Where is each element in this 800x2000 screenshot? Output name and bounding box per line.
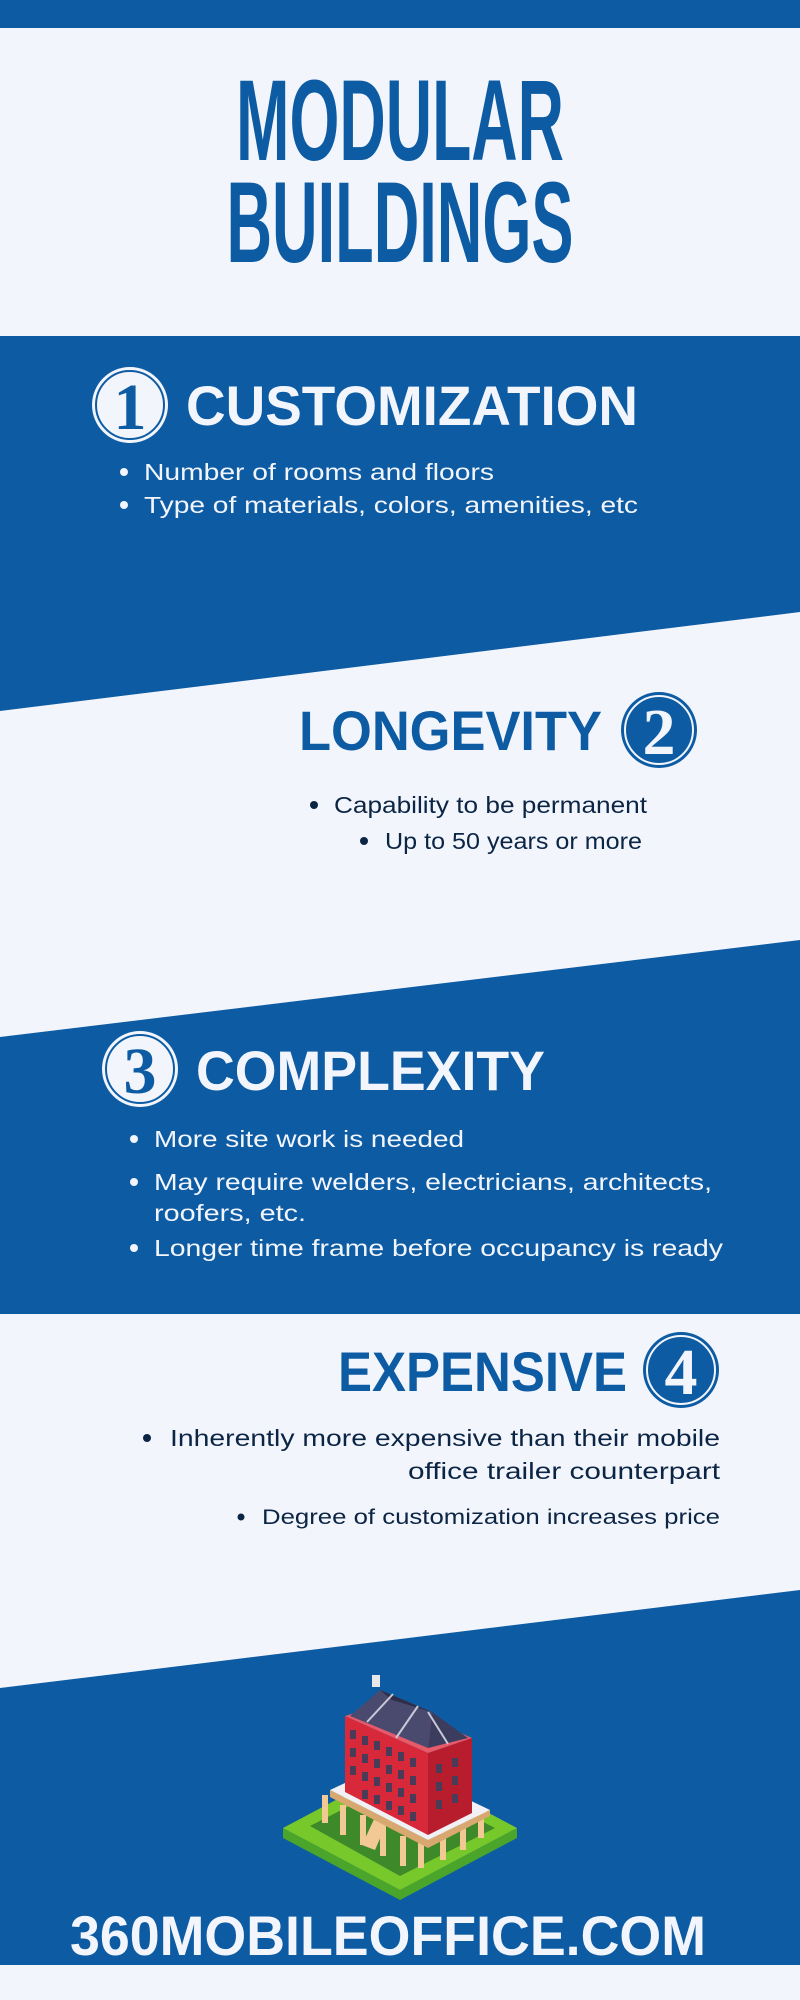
- panel: expensive: [143, 1332, 721, 1529]
- icon: number 1: [92, 367, 168, 444]
- bullet list: Number of rooms and floors: [144, 459, 494, 485]
- icon: number 2: 2: [642, 696, 676, 769]
- windows: [350, 1730, 458, 1821]
- bullet list: roofers, etc.: [154, 1200, 306, 1226]
- bullet list: Capability to be permanent: [334, 792, 648, 818]
- bullet list: Longer time frame before occupancy is ready: [154, 1235, 724, 1261]
- bullet list: [120, 459, 638, 518]
- ground: [283, 1828, 517, 1900]
- bullet list: Up to 50 years or more: [385, 828, 642, 854]
- roof: [350, 1690, 432, 1748]
- icon: number 3: [102, 1031, 178, 1108]
- icon: number 2: [621, 692, 697, 769]
- heading: expensive: EXPENSIVE: [338, 1340, 627, 1403]
- footer website: 360MOBILEOFFICE.COM: [70, 1904, 706, 1967]
- bullet list: Inherently more expensive than their mobile: [170, 1425, 720, 1451]
- bullet list: office trailer counterpart: [408, 1458, 721, 1484]
- heading: longevity: LONGEVITY: [299, 699, 602, 762]
- bullet list: Degree of customization increases price: [262, 1506, 720, 1529]
- title: [226, 57, 574, 287]
- icon: number 4: 4: [664, 1336, 698, 1409]
- icon: number 1: 1: [114, 371, 146, 444]
- bullet list: May require welders, electricians, architects,: [154, 1169, 712, 1195]
- bullet list: [130, 1126, 724, 1261]
- walls: [345, 1716, 428, 1835]
- icon: modular building: [283, 1675, 517, 1900]
- bullet list: Type of materials, colors, amenities, etc: [144, 492, 638, 518]
- icon: number 4: [643, 1332, 719, 1409]
- heading: customization: CUSTOMIZATION: [186, 374, 638, 437]
- top bar: [0, 0, 800, 28]
- panel: customization background: [0, 336, 800, 711]
- icon: number 3: 3: [124, 1035, 156, 1108]
- bullet list: [143, 1425, 721, 1529]
- platform: [330, 1790, 490, 1848]
- heading: complexity: COMPLEXITY: [196, 1039, 545, 1102]
- panel: longevity: [299, 692, 697, 854]
- panel: customization: [92, 367, 638, 518]
- panel: footer background: [0, 1590, 800, 1965]
- stilts: [322, 1795, 484, 1868]
- panel: complexity background: [0, 940, 800, 1314]
- panel: complexity: [102, 1031, 724, 1261]
- bullet list: [310, 792, 648, 854]
- bullet list: More site work is needed: [154, 1126, 464, 1152]
